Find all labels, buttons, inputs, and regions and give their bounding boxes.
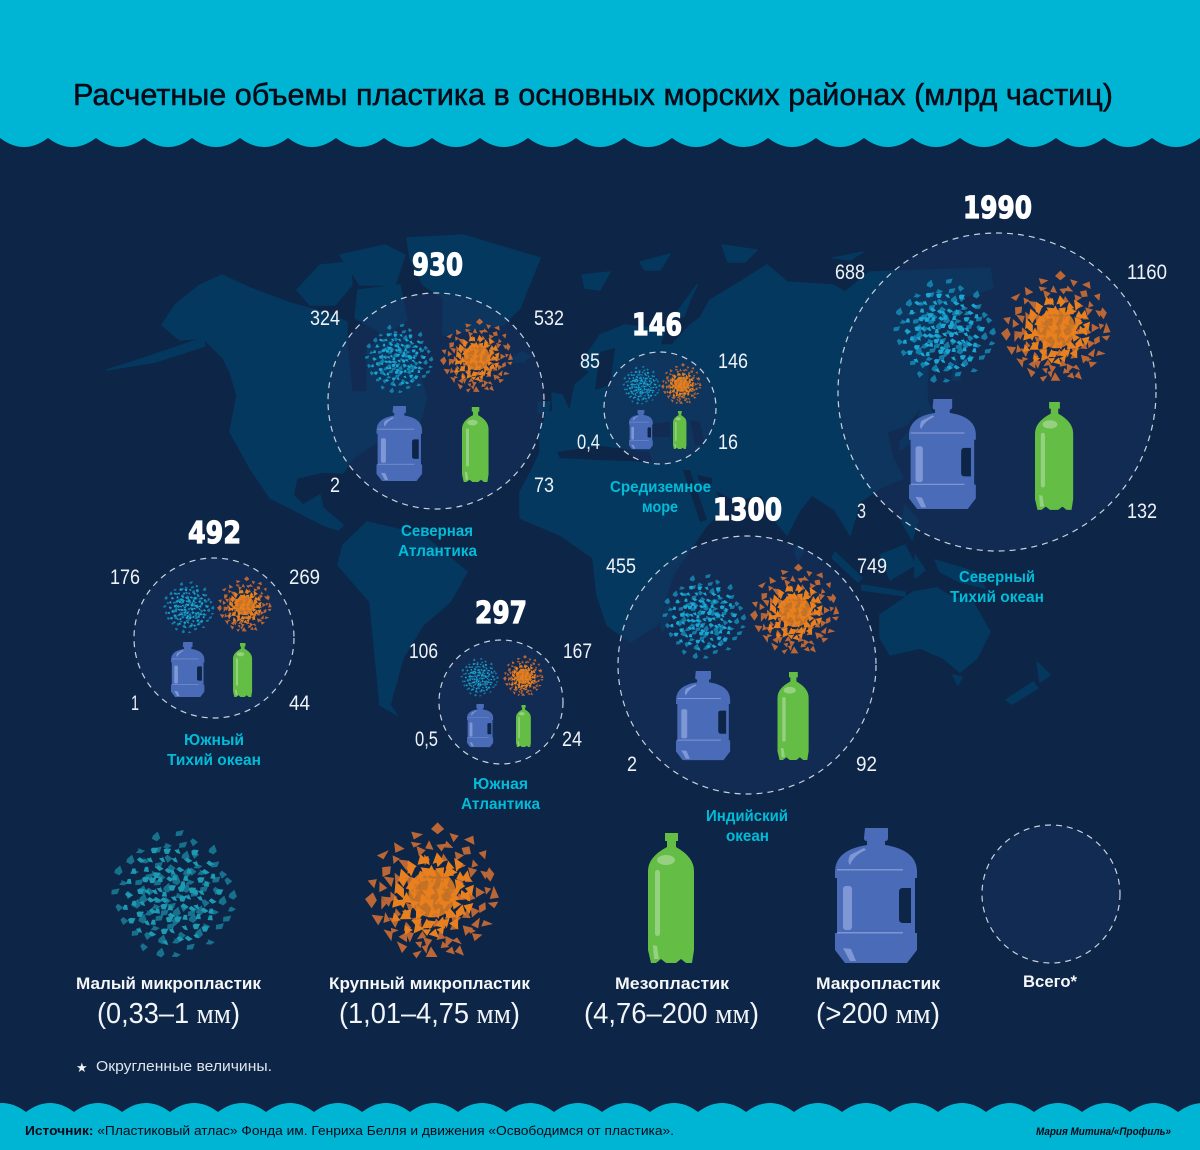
legend: large microplastic (329, 813, 530, 1030)
credit: Мария Митина/«Профиль» (1036, 1126, 1171, 1138)
small microplastic cloud (158, 576, 220, 639)
bottle (673, 411, 686, 449)
values: 44 (289, 692, 310, 715)
jug (629, 410, 653, 449)
title: Расчетные объемы пластика в основных морских районах (млрд частиц) (73, 77, 1113, 112)
region label: Средиземное (610, 479, 711, 496)
region label (398, 523, 477, 560)
region label: Индийский (706, 808, 788, 825)
values (577, 350, 748, 454)
bottle (462, 407, 489, 482)
bottle (233, 643, 252, 697)
region label (706, 808, 788, 845)
small microplastic cloud (654, 565, 755, 668)
legend: mesoplastic: (4,76–200 мм) (584, 998, 759, 1030)
total: 297 (475, 596, 527, 631)
values: 688 (835, 261, 865, 284)
circle (604, 352, 716, 464)
legend: large microplastic: Крупный микропластик (329, 974, 530, 993)
values: 106 (409, 640, 438, 663)
values: 3 (857, 500, 866, 523)
panel: South Atlantic (409, 596, 592, 813)
top banner (0, 0, 1200, 147)
legend: total (982, 825, 1120, 991)
jug (376, 406, 422, 481)
values: 455 (606, 555, 636, 578)
small microplastic cloud (358, 317, 441, 401)
legend: mesoplastic (584, 833, 759, 1030)
values: 24 (562, 728, 582, 751)
large microplastic cloud (658, 360, 706, 408)
region label: Северная (401, 523, 473, 540)
legend: small microplastic: (0,33–1 мм) (97, 998, 240, 1030)
panel: Indian Ocean (606, 493, 887, 845)
values: 1160 (1127, 261, 1167, 284)
region label: Южный (184, 732, 244, 749)
large microplastic cloud (743, 557, 849, 663)
values: 73 (534, 474, 554, 497)
values (835, 261, 1167, 523)
large microplastic cloud (500, 652, 548, 700)
circle (134, 558, 294, 718)
values: 532 (534, 307, 564, 330)
values (110, 566, 320, 715)
legend: macroplastic (816, 828, 940, 1030)
region label (610, 479, 711, 516)
large microplastic cloud (213, 572, 278, 637)
panel: North Atlantic (310, 248, 564, 560)
values: 2 (330, 474, 340, 497)
legend: macroplastic: Макропластик (816, 974, 940, 993)
inland seas (557, 348, 712, 522)
jug (676, 671, 730, 760)
bottle (778, 672, 809, 760)
region label (461, 776, 540, 813)
jug (171, 642, 204, 697)
legend: mesoplastic: Мезопластик (615, 974, 730, 993)
region label: море (642, 499, 678, 516)
circle (838, 233, 1156, 551)
jug (909, 399, 976, 509)
values (606, 555, 887, 776)
region label: Атлантика (461, 796, 540, 813)
values: 0,4 (577, 431, 600, 454)
bottle (1035, 402, 1073, 510)
region label: Южная (473, 776, 528, 793)
legend: small microplastic (76, 817, 261, 1030)
values: 132 (1127, 500, 1157, 523)
values: 176 (110, 566, 140, 589)
values: 2 (627, 753, 637, 776)
values: 85 (580, 350, 600, 373)
values: 1 (131, 692, 139, 715)
region label: Атлантика (398, 543, 477, 560)
world map (107, 235, 1050, 715)
region label: Тихий океан (167, 752, 261, 769)
legend: total: Всего* (1023, 972, 1077, 991)
bottle (516, 705, 531, 747)
region label (167, 732, 261, 769)
circle (328, 293, 544, 509)
circle (618, 536, 876, 794)
jug (467, 704, 493, 747)
bottom banner (0, 1103, 1200, 1150)
small microplastic cloud (457, 654, 503, 701)
footnote: ★ (76, 1061, 88, 1076)
source: Источник: «Пластиковый атлас» Фонда им. Генриха Белля и движения «Освободимся от пластика». (25, 1123, 674, 1138)
small microplastic cloud (619, 362, 665, 409)
total: 1300 (713, 493, 782, 528)
total: 930 (412, 248, 463, 283)
region label: Тихий океан (950, 589, 1044, 606)
circle (439, 640, 563, 764)
footnote: Округленные величины. (96, 1058, 272, 1075)
region label: Северный (959, 569, 1035, 586)
total: 146 (632, 308, 682, 343)
small microplastic cloud (883, 268, 1007, 394)
total: 1990 (963, 191, 1032, 226)
values (310, 307, 564, 497)
values: 749 (857, 555, 887, 578)
large microplastic cloud (993, 263, 1122, 393)
panel: South Pacific (110, 516, 320, 769)
values: 324 (310, 307, 340, 330)
values (409, 640, 592, 751)
values: 92 (856, 753, 877, 776)
values: 269 (289, 566, 320, 589)
legend: macroplastic: (>200 мм) (816, 998, 940, 1030)
panel: North Pacific (835, 191, 1167, 606)
region label (950, 569, 1044, 606)
values: 146 (718, 350, 748, 373)
large microplastic cloud (434, 313, 521, 400)
region label: океан (726, 828, 769, 845)
values: 16 (718, 431, 738, 454)
legend: large microplastic: (1,01–4,75 мм) (339, 998, 520, 1030)
panel: Mediterranean (577, 308, 748, 516)
values: 167 (563, 640, 592, 663)
values: 0,5 (415, 728, 438, 751)
legend: small microplastic: Малый микропластик (76, 974, 261, 993)
total: 492 (188, 516, 241, 551)
